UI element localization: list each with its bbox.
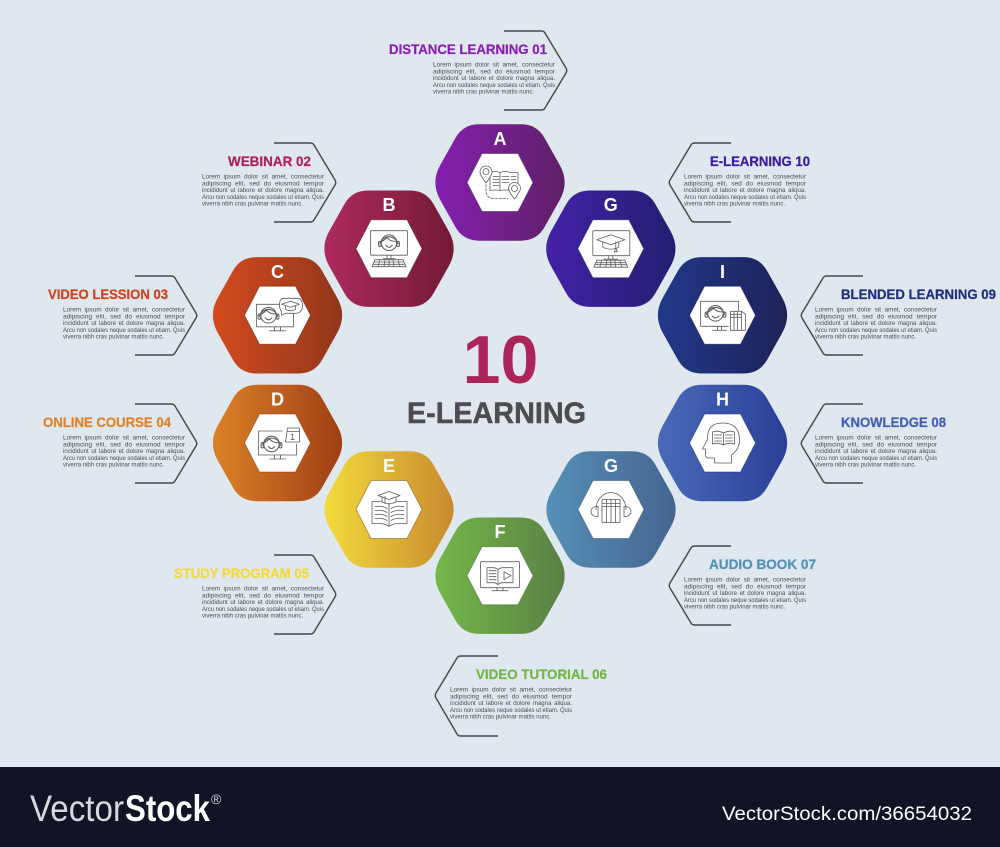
body text: Arcu non sodales neque sodales ut etiam. Quis [684,194,806,201]
body text: Lorem ipsum dolor sit amet, consectetur [815,306,938,314]
footer logo: ® [211,791,222,807]
body text: adipiscing elit, sed do eiusmod tempor [202,180,325,187]
body text [815,434,938,469]
icon: online course monitor with calendar: 1 [290,432,295,442]
callout: study program 05 [174,555,336,634]
hexagon H [658,385,787,501]
body text [63,434,186,469]
body text: Arcu non sodales neque sodales ut etiam. Quis [450,707,572,714]
body text [202,174,325,208]
bracket [669,546,731,625]
icon: head with book [702,423,740,463]
footer bar [0,767,1000,847]
callout: e-learning 10 [669,143,810,222]
callout: knowledge 08 [801,404,946,483]
center title: E-LEARNING [407,397,586,430]
hexagon C: C [271,262,284,282]
body text: adipiscing elit, sed do eiusmod tempor [433,68,556,75]
body text: incididunt ut labore et dolore magna aliqua. [684,590,806,597]
hexagon G (e-learning): G [604,195,618,215]
body text: adipiscing elit, sed do eiusmod tempor [684,180,807,187]
footer logo: Vector [30,788,124,829]
bracket [274,143,336,222]
bracket [274,555,336,634]
body text: incididunt ut labore et dolore magna aliqua. [684,187,806,194]
callout: blended learning 09 [801,276,996,355]
callout: video tutorial 06 [435,656,607,736]
heading: AUDIO BOOK 07 [709,556,816,572]
body text: Arcu non sodales neque sodales ut etiam. Quis [202,606,324,613]
hexagon D: D [271,390,284,410]
body text: Arcu non sodales neque sodales ut etiam. Quis [684,597,806,604]
icon: open book with graduation cap [372,492,407,526]
bracket [135,404,197,483]
body text: viverra nibh cras pulvinar mattis nunc. [815,334,916,341]
heading: VIDEO LESSION 03 [48,286,168,302]
body text: adipiscing elit, sed do eiusmod tempor [815,313,938,320]
body text: incididunt ut labore et dolore magna aliqua. [202,187,324,194]
body text: incididunt ut labore et dolore magna aliqua. [815,448,937,455]
body text: incididunt ut labore et dolore magna aliqua. [202,599,324,606]
hexagon G (audio book) [546,451,676,568]
icon: blended learning monitor with books [700,301,746,330]
body text: Lorem ipsum dolor sit amet, consectetur [450,686,573,694]
body text: viverra nibh cras pulvinar mattis nunc. [684,201,785,208]
heading: WEBINAR 02 [228,153,311,169]
hexagon F [435,518,565,634]
hexagon G (e-learning) [546,190,675,307]
body text: incididunt ut labore et dolore magna aliqua. [433,75,555,82]
heading: ONLINE COURSE 04 [43,414,171,430]
body text: viverra nibh cras pulvinar mattis nunc. [815,462,916,469]
body text: Lorem ipsum dolor sit amet, consectetur [815,434,938,442]
body text [450,686,573,721]
hexagon C [213,257,342,374]
bracket [801,404,863,483]
body text: viverra nibh cras pulvinar mattis nunc. [63,334,164,341]
body text: Lorem ipsum dolor sit amet, consectetur [433,62,556,68]
body text [202,586,325,620]
body text: adipiscing elit, sed do eiusmod tempor [815,441,938,448]
callout: online course 04 [43,404,197,483]
body text: Lorem ipsum dolor sit amet, consectetur [684,576,807,584]
body text: Arcu non sodales neque sodales ut etiam. Quis [202,194,324,201]
callout: video lession 03 [48,276,197,355]
hexagon D [213,385,342,501]
bracket [801,276,863,355]
body text: incididunt ut labore et dolore magna aliqua. [450,700,572,707]
callout: distance learning 01 [389,31,567,110]
body text: adipiscing elit, sed do eiusmod tempor [684,583,807,590]
hexagon E [324,451,454,568]
bracket [669,143,731,222]
hexagon A [435,124,565,241]
body text: Arcu non sodales neque sodales ut etiam. Quis [815,327,937,334]
body text: Lorem ipsum dolor sit amet, consectetur [684,174,807,180]
center number: 10 [463,322,538,398]
icon: video tutorial monitor [480,562,520,591]
heading: VIDEO TUTORIAL 06 [476,666,607,682]
body text: Lorem ipsum dolor sit amet, consectetur [63,434,186,442]
heading: KNOWLEDGE 08 [841,414,946,430]
body text: Lorem ipsum dolor sit amet, consectetur [63,306,186,314]
body text: incididunt ut labore et dolore magna aliqua. [63,320,185,327]
hexagon F: F [494,522,506,542]
body text [433,62,556,96]
hexagon B: B [382,195,396,215]
bracket [435,656,498,736]
hexagon E: E [383,456,395,476]
hexagon B [324,190,454,307]
body text [684,174,807,208]
footer logo: Stock [125,788,210,829]
body text: viverra nibh cras pulvinar mattis nunc. [433,89,534,96]
body text: Arcu non sodales neque sodales ut etiam. Quis [815,455,937,462]
body text: incididunt ut labore et dolore magna aliqua. [815,320,937,327]
body text: adipiscing elit, sed do eiusmod tempor [63,441,186,448]
icon: map book with pins [480,166,520,199]
hexagon I [658,257,787,374]
icon: webinar monitor with keyboard [370,231,408,267]
body text [815,306,938,341]
body text: Lorem ipsum dolor sit amet, consectetur [202,174,325,180]
body text: adipiscing elit, sed do eiusmod tempor [63,313,186,320]
body text: incididunt ut labore et dolore magna aliqua. [63,448,185,455]
heading: DISTANCE LEARNING 01 [389,41,547,57]
body text: viverra nibh cras pulvinar mattis nunc. [450,714,551,721]
body text: viverra nibh cras pulvinar mattis nunc. [63,462,164,469]
heading: STUDY PROGRAM 05 [174,565,309,581]
body text: adipiscing elit, sed do eiusmod tempor [450,693,573,700]
body text: Arcu non sodales neque sodales ut etiam. Quis [433,82,555,89]
footer logo [30,788,222,829]
hexagon A: A [494,129,506,149]
footer image id: VectorStock.com/36654032 [722,804,972,825]
icon: e-learning monitor with graduation cap [593,231,630,267]
icon: audio book with headphones [591,492,631,522]
body text [684,576,807,611]
body text [63,306,186,341]
hexagon I: I [720,262,725,282]
callout: webinar 02 [202,143,336,222]
icon: video lesson monitor with speech bubble [256,298,302,331]
body text: viverra nibh cras pulvinar mattis nunc. [202,613,303,620]
body text: viverra nibh cras pulvinar mattis nunc. [684,604,785,611]
body text: viverra nibh cras pulvinar mattis nunc. [202,201,303,208]
bracket [504,31,567,110]
body text: Lorem ipsum dolor sit amet, consectetur [202,586,325,592]
heading: E-LEARNING 10 [710,153,810,169]
callout: audio book 07 [669,546,816,625]
body text: adipiscing elit, sed do eiusmod tempor [202,592,325,599]
hexagon H: H [716,390,729,410]
hexagon G (audio book): G [604,456,618,476]
body text: Arcu non sodales neque sodales ut etiam. Quis [63,327,185,334]
bracket [135,276,197,355]
body text: Arcu non sodales neque sodales ut etiam. Quis [63,455,185,462]
